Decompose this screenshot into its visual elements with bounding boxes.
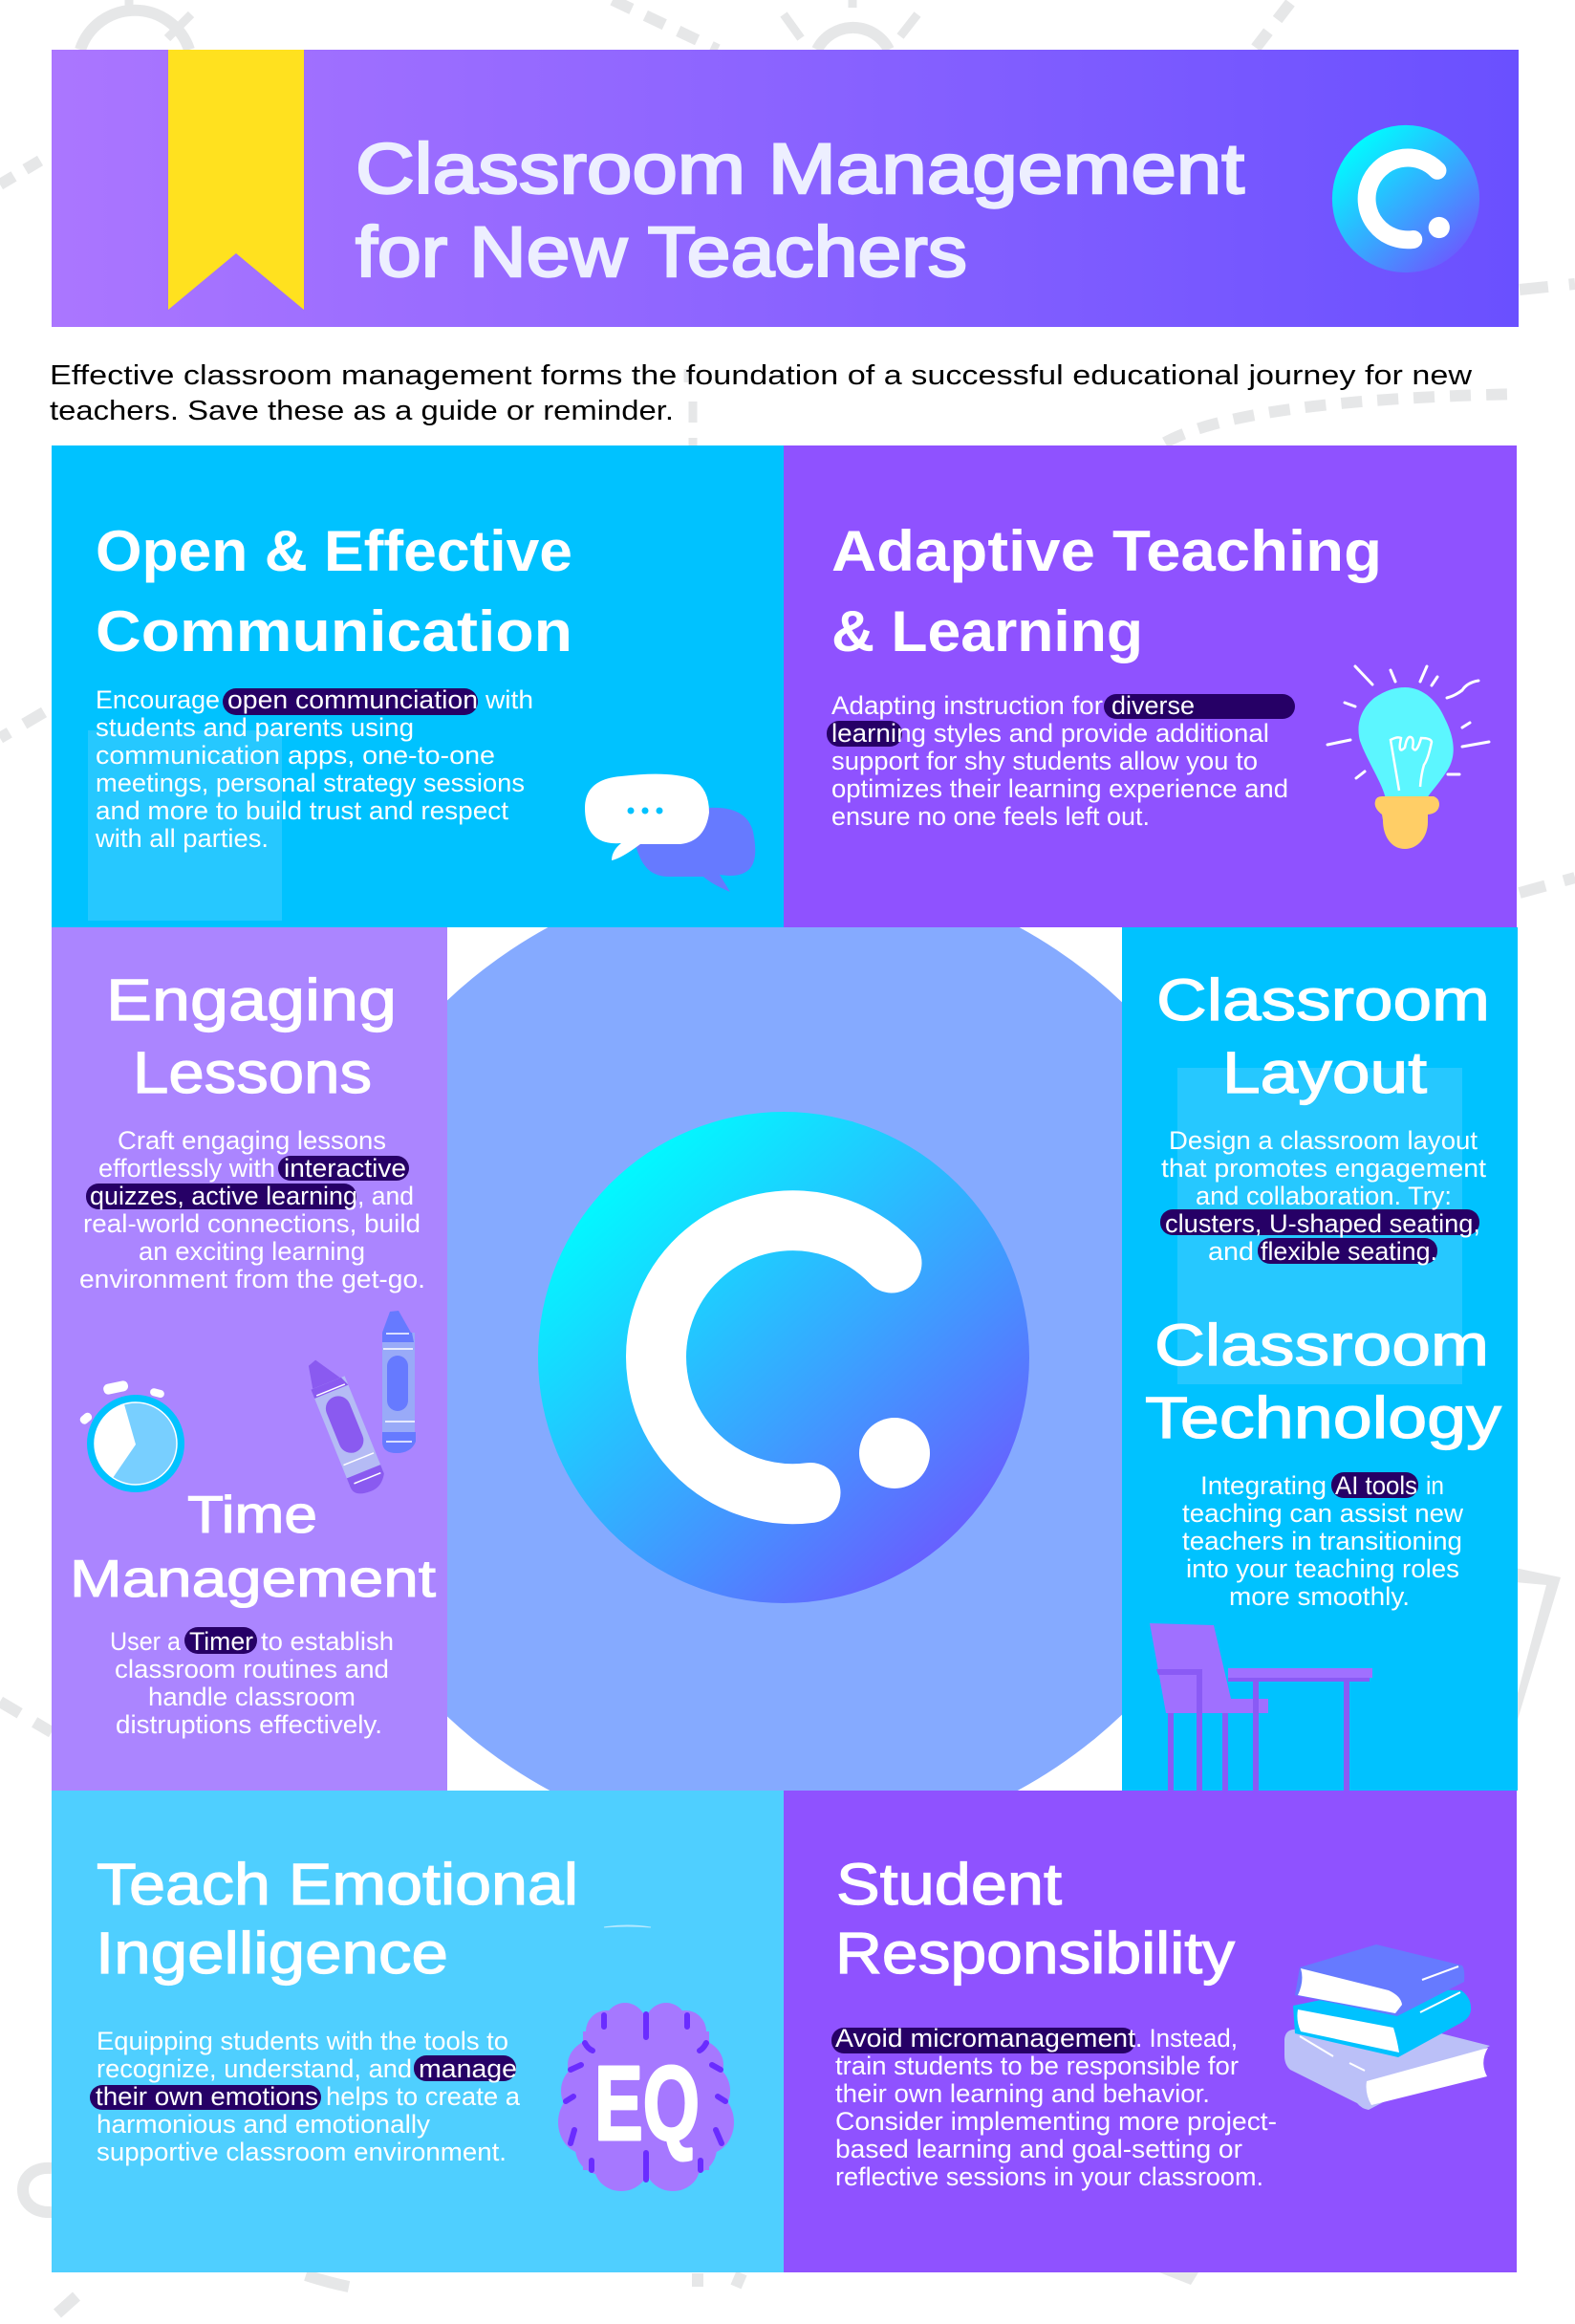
heading xyxy=(96,1852,578,1986)
body: time management: User a xyxy=(110,1627,182,1656)
body: classroom layout: that promotes engagement xyxy=(1161,1154,1487,1183)
heading: & Learning xyxy=(831,599,1143,663)
heading: classroom layout: Classroom xyxy=(1156,967,1490,1032)
heading: Teach Emotional xyxy=(97,1852,578,1917)
icon: speech bubbles xyxy=(585,774,755,892)
body text: . Instead, xyxy=(1135,2024,1238,2053)
body text: support for shy students allow you to xyxy=(831,747,1258,775)
body text: and more to build trust and respect xyxy=(96,796,509,825)
body text xyxy=(90,2027,521,2166)
heading: engaging lessons xyxy=(106,967,397,1105)
body text xyxy=(831,2024,1277,2191)
body: time management: distruptions effectively. xyxy=(116,1710,382,1739)
icon: EQ brain: EQ xyxy=(594,2045,700,2162)
icon: desk and chair xyxy=(1150,1623,1372,1791)
body text xyxy=(95,685,533,853)
body text: ensure no one feels left out. xyxy=(831,802,1150,831)
icon: stopwatch xyxy=(78,1379,184,1492)
heading xyxy=(96,519,572,663)
heading: classroom layout xyxy=(1156,967,1490,1105)
body text: with all parties. xyxy=(95,824,269,853)
body text: meetings, personal strategy sessions xyxy=(96,769,525,797)
body: engaging lessons xyxy=(79,1126,425,1293)
title: for New Teachers xyxy=(356,212,967,292)
body: time management: classroom routines and xyxy=(115,1655,389,1683)
body: time management xyxy=(110,1627,394,1739)
body text: reflective sessions in your classroom. xyxy=(835,2162,1263,2191)
body text: train students to be responsible for xyxy=(835,2052,1239,2080)
icon: stack of books xyxy=(1284,1944,1490,2110)
intro text: Effective classroom management forms the foundation of a successful educational journey for new xyxy=(50,360,1473,391)
heading: Adaptive Teaching xyxy=(831,519,1382,583)
body: engaging lessons: effortlessly with xyxy=(98,1154,275,1183)
title xyxy=(356,129,1245,292)
body text: Consider implementing more project- xyxy=(835,2107,1277,2136)
heading xyxy=(831,519,1382,663)
heading: Communication xyxy=(96,599,572,663)
body text: learning styles and provide additional xyxy=(831,719,1269,748)
body text: diverse xyxy=(1111,691,1195,720)
body: engaging lessons: quizzes, active learning xyxy=(90,1182,357,1210)
body text: harmonious and emotionally xyxy=(97,2110,431,2139)
body: classroom layout: and collaboration. Try: xyxy=(1196,1182,1452,1210)
heading: classroom technology: Classroom xyxy=(1154,1313,1489,1378)
body: engaging lessons: Craft engaging lessons xyxy=(118,1126,386,1155)
heading xyxy=(835,1852,1236,1986)
body text: Avoid micromanagement xyxy=(835,2024,1136,2053)
header banner xyxy=(52,50,1519,327)
body: engaging lessons: interactive xyxy=(284,1154,406,1183)
body text: Equipping students with the tools to xyxy=(97,2027,508,2055)
heading: classroom layout: Layout xyxy=(1222,1040,1427,1105)
body: engaging lessons: an exciting learning xyxy=(139,1237,365,1266)
icon: light bulb xyxy=(1327,666,1489,849)
heading: time management xyxy=(70,1485,436,1608)
heading: Ingelligence xyxy=(96,1921,448,1986)
body: engaging lessons: , and xyxy=(357,1182,414,1210)
body text: with xyxy=(485,685,533,714)
panel: engaging lessons and time management xyxy=(52,927,447,1791)
body: time management: handle classroom xyxy=(148,1683,356,1711)
intro text xyxy=(50,360,1473,426)
heading: time management: Management xyxy=(70,1549,436,1608)
body text: communication apps, one-to-one xyxy=(96,741,495,770)
body text: open communciation xyxy=(227,685,478,714)
body text: recognize, understand, and xyxy=(97,2054,412,2083)
body text: their own emotions xyxy=(96,2082,318,2111)
panel: adaptive teaching and learning xyxy=(784,445,1517,927)
body text: helps to create a xyxy=(326,2082,521,2111)
body: classroom technology: into your teaching roles xyxy=(1186,1554,1459,1583)
panel: open and effective communication xyxy=(52,445,784,927)
title: Classroom Management xyxy=(356,129,1245,208)
body: classroom layout: flexible seating. xyxy=(1261,1237,1437,1266)
body: time management: to establish xyxy=(261,1627,394,1656)
icon: crayons xyxy=(301,1311,416,1498)
body text: manage xyxy=(419,2054,517,2083)
body text: students and parents using xyxy=(96,713,414,742)
body text: Encourage xyxy=(96,685,220,714)
icon: EQ brain xyxy=(558,2003,734,2191)
body: classroom technology xyxy=(1182,1471,1464,1611)
body text: their own learning and behavior. xyxy=(835,2079,1210,2108)
body: classroom technology: AI tools xyxy=(1335,1471,1417,1500)
body: classroom layout: clusters, U-shaped seating, xyxy=(1165,1209,1480,1238)
panel: student responsibility xyxy=(784,1791,1517,2272)
panel: classroom layout and technology xyxy=(1122,927,1518,1791)
heading: Student xyxy=(836,1852,1062,1917)
heading: classroom technology: Technology xyxy=(1145,1385,1502,1450)
heading: Open & Effective xyxy=(96,519,572,583)
icon: small logo xyxy=(1332,125,1479,272)
body text: supportive classroom environment. xyxy=(97,2138,507,2166)
body text: based learning and goal-setting or xyxy=(835,2135,1242,2163)
heading: engaging lessons: Lessons xyxy=(133,1040,372,1105)
body: classroom layout: Design a classroom layout xyxy=(1169,1126,1478,1155)
heading: Responsibility xyxy=(835,1921,1236,1986)
intro text: teachers. Save these as a guide or reminder. xyxy=(50,396,674,426)
body: classroom technology: teaching can assist new xyxy=(1182,1499,1464,1528)
body: classroom technology: teachers in transitioning xyxy=(1182,1527,1462,1555)
panel: teach emotional intelligence xyxy=(52,1791,784,2272)
body: classroom layout xyxy=(1160,1126,1487,1266)
heading: engaging lessons: Engaging xyxy=(106,967,397,1032)
heading: time management: Time xyxy=(187,1485,317,1544)
center logo graphic xyxy=(447,927,1122,1791)
body text xyxy=(827,691,1295,831)
body: classroom technology: more smoothly. xyxy=(1229,1582,1410,1611)
body: engaging lessons: environment from the get-go. xyxy=(79,1265,425,1293)
body: classroom layout: and xyxy=(1208,1237,1254,1266)
body: classroom technology: Integrating xyxy=(1200,1471,1327,1500)
body: engaging lessons: real-world connections, build xyxy=(83,1209,421,1238)
icon: yellow bookmark xyxy=(168,50,304,310)
body: time management: Timer xyxy=(189,1627,253,1656)
heading: classroom technology xyxy=(1145,1313,1502,1450)
body text: optimizes their learning experience and xyxy=(831,774,1288,803)
body: classroom technology: in xyxy=(1426,1471,1444,1500)
body text: Adapting instruction for xyxy=(831,691,1103,720)
